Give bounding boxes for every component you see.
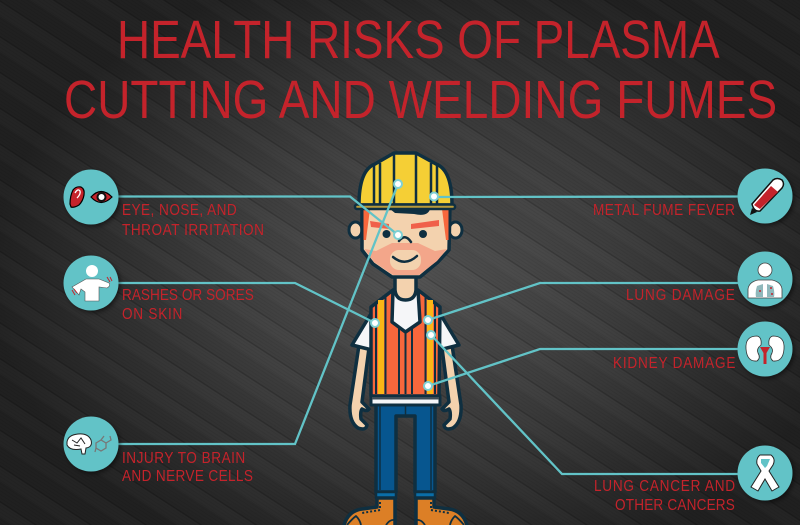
left arm (350, 345, 369, 429)
label: kidney damage: KIDNEY DAMAGE (613, 355, 736, 372)
icon: thermometer (738, 168, 792, 224)
left boot (343, 498, 395, 525)
nose (399, 237, 411, 242)
label: eye, nose, and throat irritation: THROAT IRRITATION (122, 222, 264, 239)
beard (364, 243, 447, 275)
connector lines (118, 184, 738, 474)
neck (395, 275, 416, 300)
title: CUTTING AND WELDING FUMES (64, 70, 777, 130)
icon: kidneys (738, 322, 792, 376)
cuffs (376, 492, 435, 498)
label: lung cancer and other cancers: LUNG CANCER AND (594, 478, 735, 495)
label: injury to brain and nerve cells: AND NERVE CELLS (122, 468, 253, 485)
worker figure (343, 153, 468, 525)
icon: ear and eye (64, 170, 118, 224)
face (362, 205, 450, 277)
hard hat ribs (374, 153, 437, 204)
label: injury to brain and nerve cells (122, 450, 253, 485)
label: rashes or sores on skin: RASHES OR SORES (122, 287, 254, 304)
connector dots (371, 180, 438, 390)
hard hat brim (355, 204, 455, 209)
jeans (376, 404, 435, 492)
ears (349, 222, 462, 238)
hair (364, 209, 448, 240)
label: injury to brain and nerve cells: INJURY TO BRAIN (122, 450, 245, 467)
toe caps (347, 516, 464, 525)
label: metal fume fever: METAL FUME FEVER (593, 202, 735, 219)
label: rashes or sores on skin: ON SKIN (122, 306, 182, 323)
vest (371, 290, 440, 396)
right boot (416, 498, 468, 525)
title (64, 10, 777, 130)
boot details (362, 502, 449, 513)
icon: ribbon (738, 446, 792, 500)
mouth area (390, 250, 421, 270)
vest stripes (376, 296, 435, 394)
label: eye, nose, and throat irritation (122, 202, 264, 239)
label: lung cancer and other cancers: OTHER CANCERS (615, 497, 735, 514)
icon: person with rash (64, 256, 118, 310)
icon: brain and molecule (64, 416, 118, 472)
title: HEALTH RISKS OF PLASMA (117, 10, 720, 70)
label: lung cancer and other cancers (594, 478, 735, 514)
eyebrows (370, 220, 439, 229)
icon: lungs (738, 252, 792, 306)
smile (393, 256, 417, 262)
label: rashes or sores on skin (122, 287, 254, 323)
shirt (352, 292, 459, 350)
label: eye, nose, and throat irritation: EYE, NOSE, AND (122, 202, 237, 219)
right arm (442, 345, 461, 429)
hard hat (359, 153, 452, 205)
label: lung damage: LUNG DAMAGE (626, 287, 735, 304)
vest hem (371, 396, 440, 405)
eyes (382, 230, 427, 238)
